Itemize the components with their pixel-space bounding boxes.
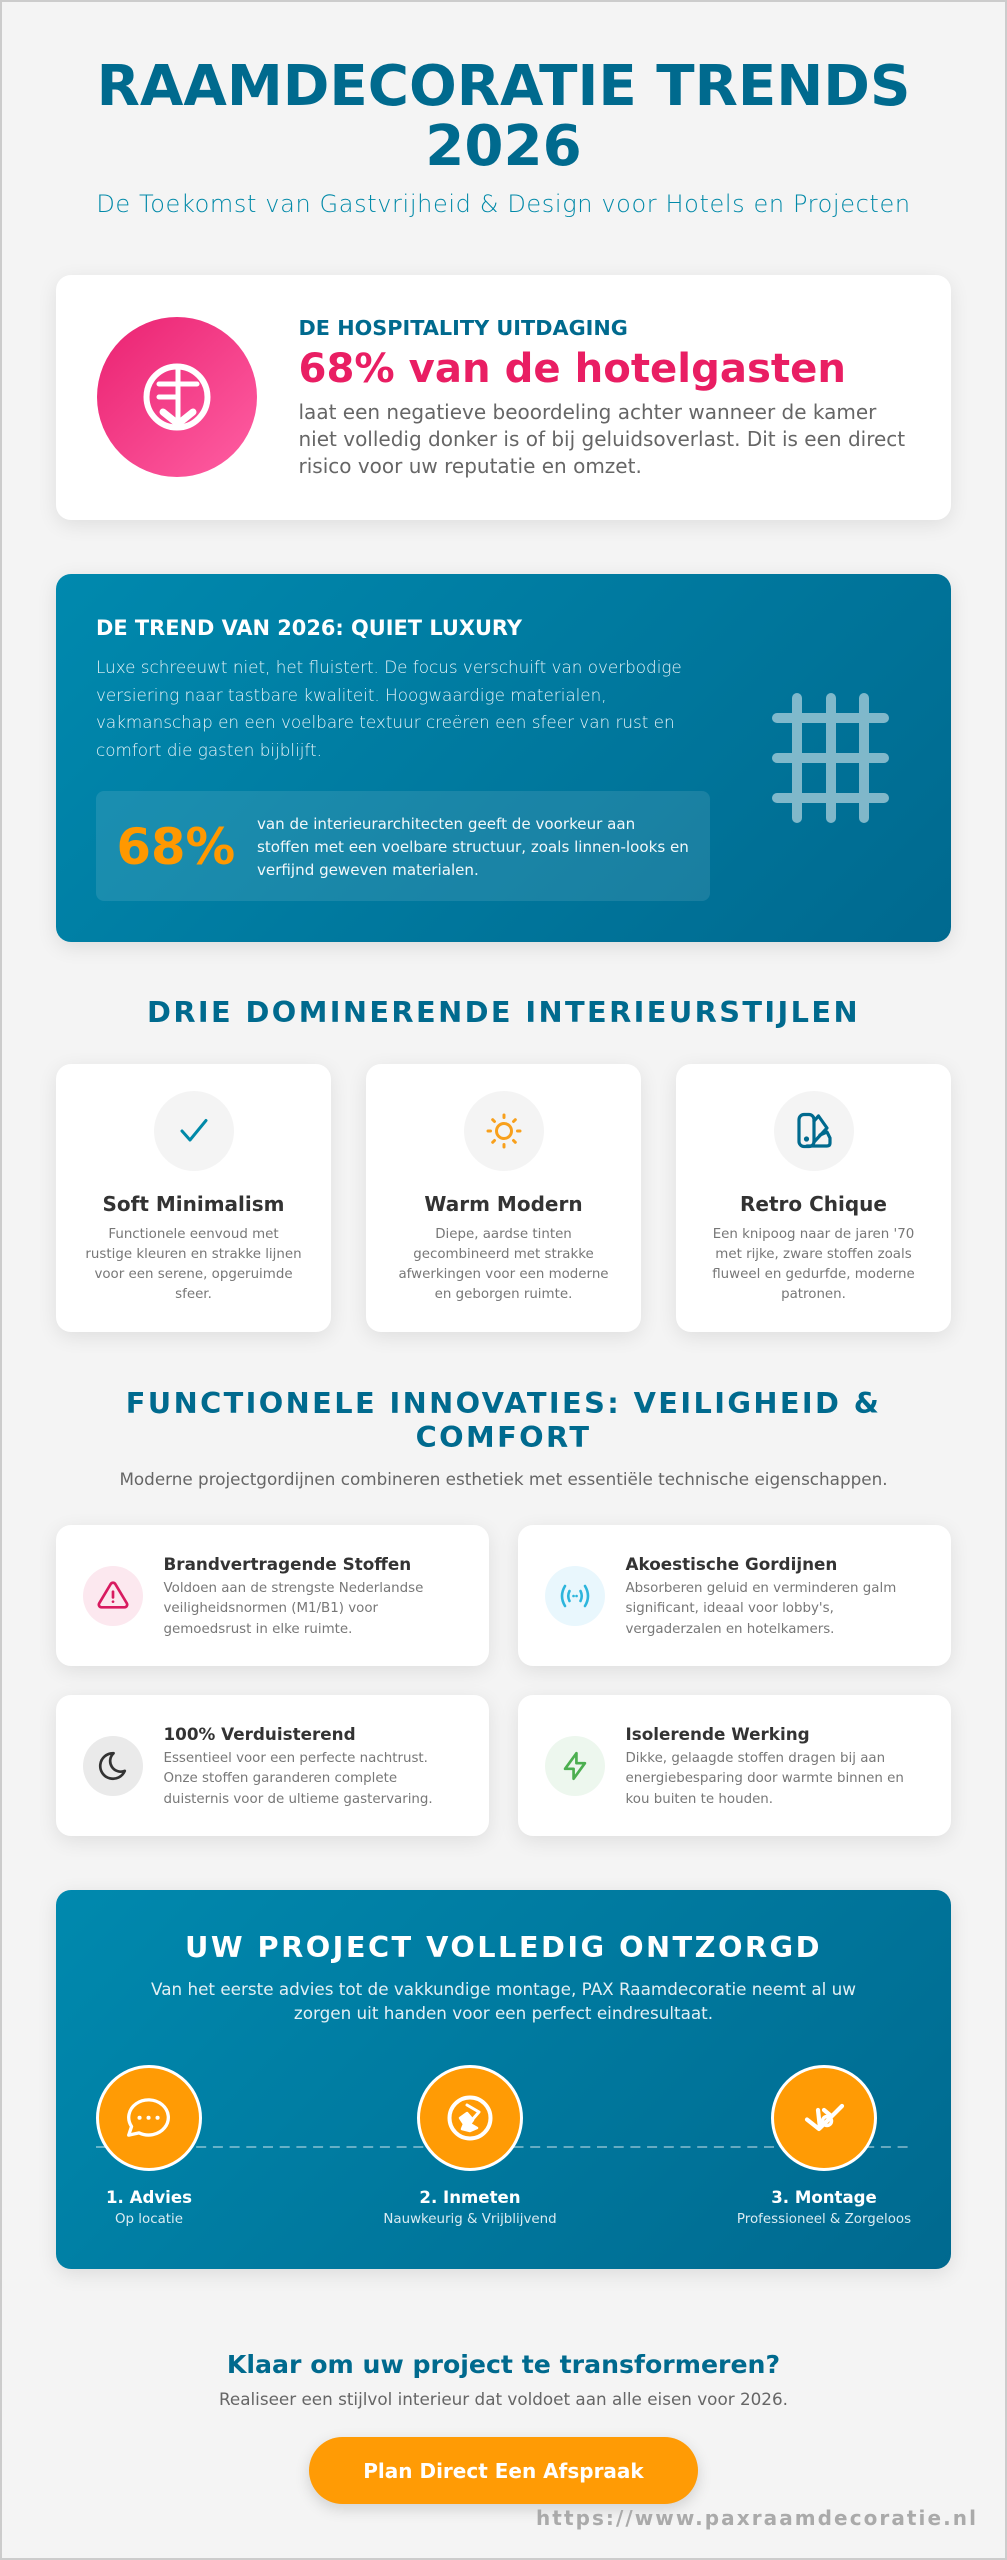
card: 100% verduisterend	[56, 1695, 488, 1836]
icon: lightning bolt	[545, 1736, 605, 1796]
heading: de hospitality uitdaging: DE HOSPITALITY UITDAGING	[298, 316, 628, 340]
text block: project intro: Van het eerste advies tot de vakkundige montage, PAX Raamdecoratie neemt al uw	[151, 1978, 856, 1998]
text block: call to action: Realiseer een stijlvol interieur dat voldoet aan alle eisen voor 2026.	[219, 2388, 788, 2408]
icon: warning triangle	[83, 1566, 143, 1626]
text block: project intro: zorgen uit handen voor een perfect eindresultaat.	[294, 2002, 713, 2022]
heading: functionele innovaties: FUNCTIONELE INNOVATIES: VEILIGHEID &	[126, 1386, 881, 1420]
step title: 3. Montage	[771, 2188, 877, 2207]
feature text: gemoedsrust in elke ruimte.	[164, 1622, 352, 1637]
website url: https://www.paxraamdecoratie.nl	[536, 2506, 978, 2530]
title: 2026	[425, 114, 582, 179]
panel: uw project volledig ontzorgd	[56, 1890, 951, 2269]
text block: innovations intro: Moderne projectgordijnen combineren esthetiek met essentiële technische eigenschappen.	[119, 1469, 888, 1489]
card: warm modern	[366, 1064, 641, 1332]
card: soft minimalism	[56, 1064, 331, 1332]
icon: check	[154, 1091, 234, 1171]
text block: risk description	[298, 400, 905, 478]
feature text: significant, ideaal voor lobby's,	[626, 1601, 834, 1616]
heading: drie dominerende interieurstijlen: DRIE DOMINERENDE INTERIEURSTIJLEN	[147, 995, 860, 1029]
feature title: Brandvertragende Stoffen	[164, 1554, 411, 1574]
card text: Een knipoog naar de jaren '70	[713, 1226, 914, 1242]
stat description: stoffen met een voelbare structuur, zoals linnen-looks en	[257, 838, 689, 856]
text block: risk description: risico voor uw reputatie en omzet.	[298, 454, 642, 478]
text block: quiet luxury description: comfort die gasten bijblijft.	[96, 740, 322, 760]
arrow: dashed timeline connector	[96, 2146, 908, 2148]
icon: sun	[464, 1091, 544, 1171]
subtitle: De Toekomst van Gastvrijheid & Design voor Hotels en Projecten	[96, 190, 911, 218]
icon: sound waves	[545, 1566, 605, 1626]
feature text	[626, 1751, 904, 1807]
callout: 68% architects statistic	[96, 791, 710, 901]
card text: gecombineerd met strakke	[413, 1247, 594, 1262]
feature text: duisternis voor de ultieme gastervaring.	[164, 1792, 433, 1807]
card: brandvertragende stoffen	[56, 1525, 488, 1666]
step text: Op locatie	[115, 2212, 183, 2227]
feature text: Absorberen geluid en verminderen galm	[626, 1581, 896, 1596]
card text: Functionele eenvoud met	[108, 1226, 279, 1242]
stat: 68% van de hotelgasten: 68% van de hotelgasten	[298, 346, 846, 392]
card title: Soft Minimalism	[102, 1192, 284, 1216]
feature text: veiligheidsnormen (M1/B1) voor	[164, 1601, 378, 1616]
step 3: montage	[737, 2065, 911, 2227]
card: akoestische gordijnen	[518, 1525, 950, 1666]
card title: Retro Chique	[740, 1192, 887, 1216]
button: plan direct een afspraak	[309, 2437, 698, 2504]
feature title: Isolerende Werking	[626, 1724, 810, 1744]
text block: quiet luxury description: Luxe schreeuwt niet, het fluistert. De focus verschuift van overbodige	[96, 657, 682, 677]
card text	[398, 1226, 609, 1302]
card text: Diepe, aardse tinten	[435, 1226, 572, 1242]
text block: risk description: niet volledig donker is of bij geluidsoverlast. Dit is een direct	[298, 427, 905, 451]
icon: hospitality badge	[97, 317, 257, 477]
panel: hospitality challenge	[56, 275, 951, 520]
feature text	[164, 1751, 433, 1807]
step 1: advies	[96, 2065, 202, 2227]
heading: uw project: UW PROJECT VOLLEDIG ONTZORGD	[185, 1930, 822, 1964]
stat number: 68%	[116, 818, 235, 876]
card: isolerende werking	[518, 1695, 950, 1836]
button: plan direct een afspraak: Plan Direct Een Afspraak	[363, 2459, 644, 2483]
stat description: van de interieurarchitecten geeft de voorkeur aan	[257, 814, 635, 832]
heading: call to action: Klaar om uw project te transformeren?	[227, 2350, 780, 2379]
icon: color swatch	[774, 1091, 854, 1171]
text block: quiet luxury description: versiering naar tastbare kwaliteit. Hoogwaardige materialen,	[96, 685, 607, 705]
card title: Warm Modern	[424, 1192, 583, 1216]
card text: met rijke, zware stoffen zoals	[715, 1247, 912, 1262]
feature text: energiebesparing door warmte binnen en	[626, 1771, 904, 1786]
step text: Professioneel & Zorgeloos	[737, 2212, 911, 2227]
card text: patronen.	[781, 1287, 846, 1302]
step title: 2. Inmeten	[419, 2188, 521, 2207]
text block: quiet luxury description: vakmanschap en een voelbare textuur creëren een sfeer van rust en	[96, 712, 675, 732]
stat description	[257, 814, 689, 879]
card text	[85, 1226, 302, 1302]
heading: functionele innovaties	[126, 1386, 881, 1454]
step 2: inmeten	[383, 2065, 557, 2227]
text block: risk description: laat een negatieve beoordeling achter wanneer de kamer	[298, 400, 876, 424]
panel: quiet luxury trend	[56, 574, 951, 942]
feature text: vergaderzalen en hotelkamers.	[626, 1622, 834, 1637]
feature title: 100% Verduisterend	[164, 1724, 356, 1744]
card text: rustige kleuren en strakke lijnen	[85, 1247, 302, 1262]
icon: chat bubble	[96, 2065, 202, 2171]
feature title: Akoestische Gordijnen	[626, 1554, 837, 1574]
icon: moon	[83, 1736, 143, 1796]
feature text: Onze stoffen garanderen complete	[164, 1771, 397, 1786]
feature text	[164, 1581, 423, 1637]
icon: fabric weave grid	[772, 693, 889, 823]
text block: project intro	[151, 1978, 856, 2022]
card: retro chique	[676, 1064, 951, 1332]
icon: handshake	[770, 2065, 876, 2171]
text block: quiet luxury description	[96, 657, 682, 760]
card text	[712, 1226, 915, 1302]
card text: afwerkingen voor een moderne	[398, 1267, 609, 1282]
feature text: Voldoen aan de strengste Nederlandse	[164, 1581, 423, 1596]
card text: voor een serene, opgeruimde	[94, 1267, 293, 1282]
feature text: Dikke, gelaagde stoffen dragen bij aan	[626, 1751, 885, 1766]
heading: functionele innovaties: COMFORT	[416, 1420, 591, 1454]
card text: sfeer.	[175, 1287, 212, 1302]
title	[97, 54, 910, 179]
step text: Nauwkeurig & Vrijblijvend	[383, 2212, 557, 2227]
heading: quiet luxury: DE TREND VAN 2026: QUIET LUXURY	[96, 616, 522, 640]
step title: 1. Advies	[106, 2188, 192, 2207]
card text: en geborgen ruimte.	[435, 1287, 572, 1302]
icon: measuring badge	[416, 2065, 522, 2171]
feature text: kou buiten te houden.	[626, 1792, 773, 1807]
feature text: Essentieel voor een perfecte nachtrust.	[164, 1751, 428, 1766]
stat description: verfijnd geweven materialen.	[257, 861, 479, 879]
feature text	[626, 1581, 896, 1637]
card text: fluweel en gedurfde, moderne	[712, 1267, 915, 1282]
title: RAAMDECORATIE TRENDS	[97, 54, 910, 119]
